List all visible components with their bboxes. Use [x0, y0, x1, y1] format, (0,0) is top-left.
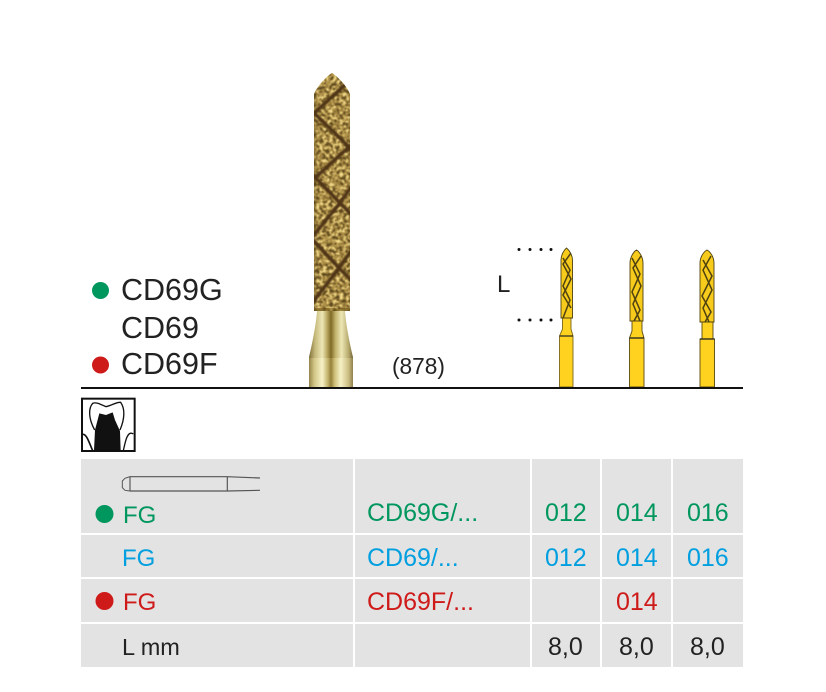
row: CD69F: 014 [616, 588, 658, 616]
small bur 016 [699, 249, 715, 387]
row: CD69F: FG [123, 589, 156, 616]
bur shank [309, 311, 353, 387]
small bur 014 [629, 249, 644, 387]
large diamond bur [309, 71, 353, 387]
row: L mm: 8,0 [619, 633, 654, 661]
legend: product codes [92, 273, 223, 381]
row: CD69F: CD69F/... [367, 588, 474, 616]
row: CD69: FG [122, 545, 155, 572]
row: L mm: 8,0 [548, 633, 583, 661]
row: CD69G: FG [123, 502, 156, 529]
baseline rule [81, 387, 743, 389]
legend: product codes: CD69 [121, 311, 199, 345]
bur diamond head [314, 73, 350, 311]
row: CD69G: 012 [545, 499, 587, 527]
specification table [81, 459, 743, 667]
length marker L [497, 248, 552, 322]
row: CD69: 012 [545, 544, 587, 572]
row: CD69G: 014 [616, 499, 658, 527]
legend: product codes: CD69G [121, 273, 223, 307]
red dot [92, 356, 109, 374]
green dot [92, 282, 109, 299]
icon: tooth preparation [82, 399, 135, 451]
small bur 012 [560, 247, 574, 387]
length marker L: L [497, 271, 510, 298]
row: CD69F [96, 588, 658, 616]
icon: FG shank outline [122, 477, 260, 491]
row: L mm [122, 633, 725, 661]
row: CD69 [122, 544, 729, 572]
row: CD69: CD69/... [367, 544, 459, 572]
row: CD69: 016 [687, 544, 729, 572]
row: CD69G: 016 [687, 499, 729, 527]
row: CD69G [96, 499, 729, 529]
legend: product codes: CD69F [121, 347, 218, 381]
row: L mm: L mm [122, 634, 180, 660]
row: CD69G: CD69G/... [367, 499, 478, 527]
table cell backgrounds [81, 459, 743, 667]
row: CD69: 014 [616, 544, 658, 572]
row: L mm: 8,0 [690, 633, 725, 661]
reference number: (878) [392, 353, 445, 379]
